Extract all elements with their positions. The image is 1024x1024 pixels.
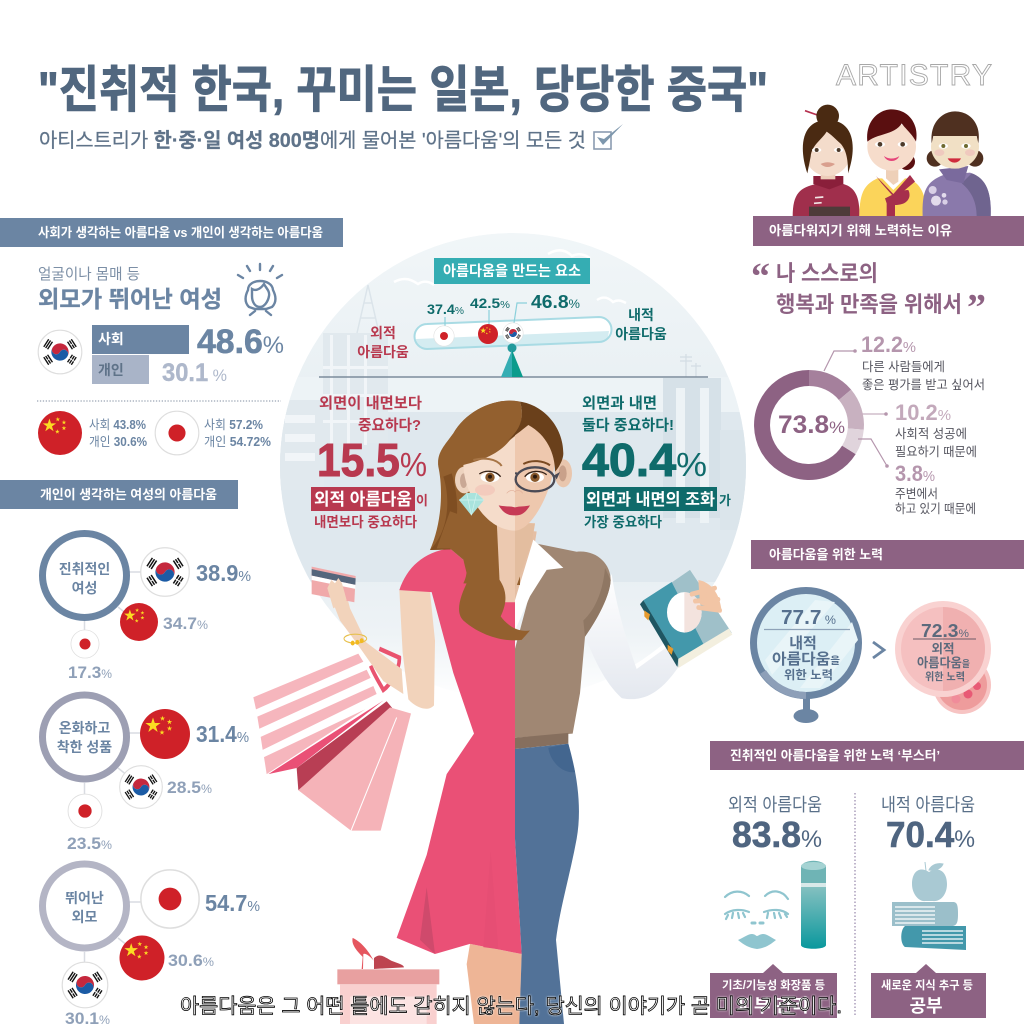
label: inner beauty: [615, 307, 667, 342]
illustration: woman half and half: [253, 401, 732, 1024]
quote heading: 행복과 만족을 위해서: [776, 292, 962, 317]
header: reason for effort: 아름다워지기 위해 노력하는 이유: [769, 223, 952, 238]
callout: 3.8%: 하고 있기 때문에: [895, 502, 976, 516]
highlight: harmony: 가: [719, 493, 731, 508]
label: outer beauty: [357, 325, 409, 360]
marker: China 42.5: [470, 295, 510, 344]
text: both important: [582, 395, 731, 530]
bar: society: 사회: [98, 331, 124, 347]
marker: Japan 37.4: 37.4%: [427, 301, 464, 317]
callout: 12.2%: 다른 사람들에게: [862, 360, 945, 374]
caption: both: 가장 중요하다: [584, 514, 662, 530]
cluster: outstanding looks: 뛰어난: [65, 890, 104, 906]
icon: bottle: [801, 861, 826, 949]
flag: China: [38, 411, 82, 455]
shopping bags and body: [253, 529, 732, 1024]
horizon line: [319, 376, 708, 378]
header: society vs individual: [0, 218, 343, 247]
logo: ARTISTRY: ARTISTRY: [836, 59, 992, 92]
callout: 10.2%: 사회적 성공에: [895, 427, 967, 441]
icon: blush compact with 72.3%: [895, 601, 991, 714]
callout: 12.2%: [824, 332, 985, 392]
icon: blush compact with 72.3%: 위한 노력: [925, 670, 965, 683]
flag: Japan: [155, 411, 199, 455]
cluster: outstanding looks: 외모: [72, 909, 97, 925]
cluster: gentle personality: 28.5%: [167, 778, 212, 797]
question: outer: [319, 395, 422, 434]
icon: mirror with 77.7%: [754, 590, 858, 723]
box: skincare: 피부 관리: [737, 996, 809, 1016]
question: both: 외면과 내면: [582, 395, 657, 412]
icon: blush compact with 72.3%: 72.3%: [921, 621, 969, 641]
donut chart: 73.8%: [762, 378, 856, 472]
cluster: gentle personality: 온화하고: [59, 720, 110, 736]
box: study: [871, 964, 986, 1018]
label: inner beauty: 아름다움: [615, 326, 667, 342]
callout: 12.2%: 좋은 평가를 받고 싶어서: [862, 378, 985, 392]
icon: blush compact with 72.3%: 외적: [931, 641, 955, 656]
values: Japan: 사회 57.2%: [204, 418, 263, 432]
cluster: gentle personality: 착한 성품: [57, 739, 112, 755]
value: 83.8%: 83.8%: [732, 814, 822, 855]
icon: apple on books: [892, 862, 966, 950]
values: Japan: [204, 418, 271, 449]
callout: 10.2%: 필요하기 때문에: [895, 445, 977, 459]
cluster: outstanding looks: 30.6%: [168, 951, 214, 970]
cluster: progressive woman: 17.3%: [68, 663, 112, 682]
callout: 10.2%: [860, 400, 977, 459]
highlight: outer beauty: 외적 아름다움: [314, 490, 412, 509]
value: 40.4%: 40.4%: [582, 434, 707, 486]
caption: outer: 내면보다 중요하다: [314, 514, 417, 530]
text: outer more important: [311, 395, 428, 530]
marker: Korea 46.8: [503, 292, 580, 343]
box: study: 공부: [909, 996, 943, 1016]
header: reason for effort: [753, 216, 1024, 246]
panel: inner booster: [871, 795, 986, 1018]
arrow: greater than: [873, 642, 884, 658]
icon: mirror with 77.7%: 아름다움 을: [772, 651, 840, 668]
cluster: progressive woman: [42, 534, 251, 682]
quote heading: ”: [967, 287, 986, 329]
donut chart: 73.8%: 73.8%: [778, 411, 845, 439]
icon: woman face with rays: [238, 264, 282, 315]
label: outer beauty: 아름다움: [357, 344, 409, 360]
cluster: progressive woman: 38.9%: [196, 560, 251, 586]
heading: outstanding looks: 외모가 뛰어난 여성: [38, 286, 222, 312]
flag: Korea: [38, 330, 82, 374]
marker: China 42.5: 42.5 %: [470, 295, 510, 311]
header: effort for beauty: 아름다움을 위한 노력: [769, 547, 883, 562]
header: elements of beauty: 아름다움을 만드는 요소: [443, 263, 581, 280]
callout: 3.8%: 3.8%: [895, 461, 935, 486]
highlight: harmony: 외면과 내면의 조화: [586, 490, 715, 509]
background circle with city: [280, 233, 750, 699]
scale: tilted tube: [414, 317, 612, 377]
cluster: outstanding looks: 54.7%: [205, 890, 260, 916]
box: skincare: [710, 964, 837, 1018]
icon: sleeping face: [725, 891, 788, 949]
panel: appearance comparison: [38, 264, 284, 455]
callout: 12.2%: 12.2%: [861, 332, 916, 357]
box: skincare: 기초/기능성 화장품 등: [722, 978, 825, 992]
callout: 10.2%: 10.2%: [895, 400, 951, 425]
header: effort for beauty: [751, 540, 1024, 569]
value: 15.5%: 15.5%: [317, 434, 427, 486]
icon: blush compact with 72.3%: 아름다움을: [917, 655, 970, 670]
hair lock: [437, 511, 530, 640]
header: booster: 진취적인 아름다움을 위한 노력 ‘부스터’: [730, 748, 940, 763]
label: inner: 내적 아름다움: [881, 795, 975, 815]
bar: individual: [92, 355, 149, 384]
values: China: 사회 43.8%: [89, 418, 146, 432]
cluster: gentle personality: [42, 695, 249, 853]
quote heading: “: [751, 256, 770, 298]
value: society: 48.6%: [197, 323, 284, 361]
panel: outer booster: [710, 795, 837, 1018]
icon: mirror with 77.7%: 내적: [789, 635, 817, 652]
values: China: [89, 418, 147, 449]
subtitle: 아티스트리가 한·중·일 여성 800명에게 물어본 '아름다움'의 모든 것: [39, 129, 586, 152]
quote heading: 나 스스로의: [776, 261, 878, 286]
label: outer beauty: 외적: [370, 325, 396, 341]
icon: mirror with 77.7%: 위한 노력: [784, 667, 833, 682]
value: 70.4%: 70.4%: [886, 814, 975, 855]
cluster: outstanding looks: [42, 864, 260, 1024]
highlight: harmony: [584, 487, 731, 511]
caption overlay: 아름다움은 그 어떤 틀에도 갇히지 않는다, 당신의 이야기가 곧 미의 기준이다.: [180, 995, 842, 1018]
bar: society: [92, 325, 189, 354]
highlight: outer beauty: 이: [416, 493, 428, 508]
header: beauty individuals think: [0, 480, 238, 509]
panel: elements of beauty: [357, 258, 667, 377]
callout: 3.8%: [858, 439, 976, 516]
icon: mirror with 77.7%: 77.7 %: [781, 607, 836, 629]
value: individual: 30.1 %: [162, 359, 227, 387]
question: outer: 중요하다?: [358, 417, 421, 434]
cluster: progressive woman: 34.7%: [163, 614, 208, 633]
question: outer: 외면이 내면보다: [319, 395, 422, 412]
marker: Korea 46.8: 46.8%: [531, 292, 580, 312]
callout: 3.8%: 주변에서: [895, 487, 938, 501]
label: outer: 외적 아름다움: [728, 795, 822, 815]
illustration: three women: [793, 105, 991, 217]
question: both: 둘다 중요하다!: [582, 417, 674, 434]
cluster: progressive woman: 여성: [72, 580, 97, 596]
values: China: 개인 30.6%: [89, 435, 147, 449]
cluster: gentle personality: 23.5%: [67, 834, 112, 853]
label: inner beauty: 내적: [628, 307, 654, 323]
icon: checkbox: [594, 124, 623, 149]
bar: individual: 개인: [98, 362, 124, 378]
title: "진취적 한국, 꾸미는 일본, 당당한 중국": [38, 62, 768, 118]
marker: Japan 37.4: [427, 301, 464, 346]
header: booster: [710, 741, 1024, 770]
header: beauty individuals think: 개인이 생각하는 여성의 아름다움: [40, 487, 217, 502]
box: study: 새로운 지식 추구 등: [881, 978, 973, 992]
header: elements of beauty: [434, 258, 590, 284]
cluster: gentle personality: 31.4%: [196, 721, 249, 747]
values: Japan: 개인 54.72%: [204, 435, 271, 449]
hair back and head: [430, 401, 572, 590]
quote heading: [751, 256, 986, 329]
header: society vs individual: 사회가 생각하는 아름다움 vs 개인이 생각하는 아름다움: [38, 225, 323, 240]
cluster: progressive woman: 진취적인: [59, 561, 110, 577]
highlight: outer beauty: [311, 487, 428, 511]
question: both: [582, 395, 674, 434]
text: lead line: 얼굴이나 몸매 등: [38, 266, 140, 283]
